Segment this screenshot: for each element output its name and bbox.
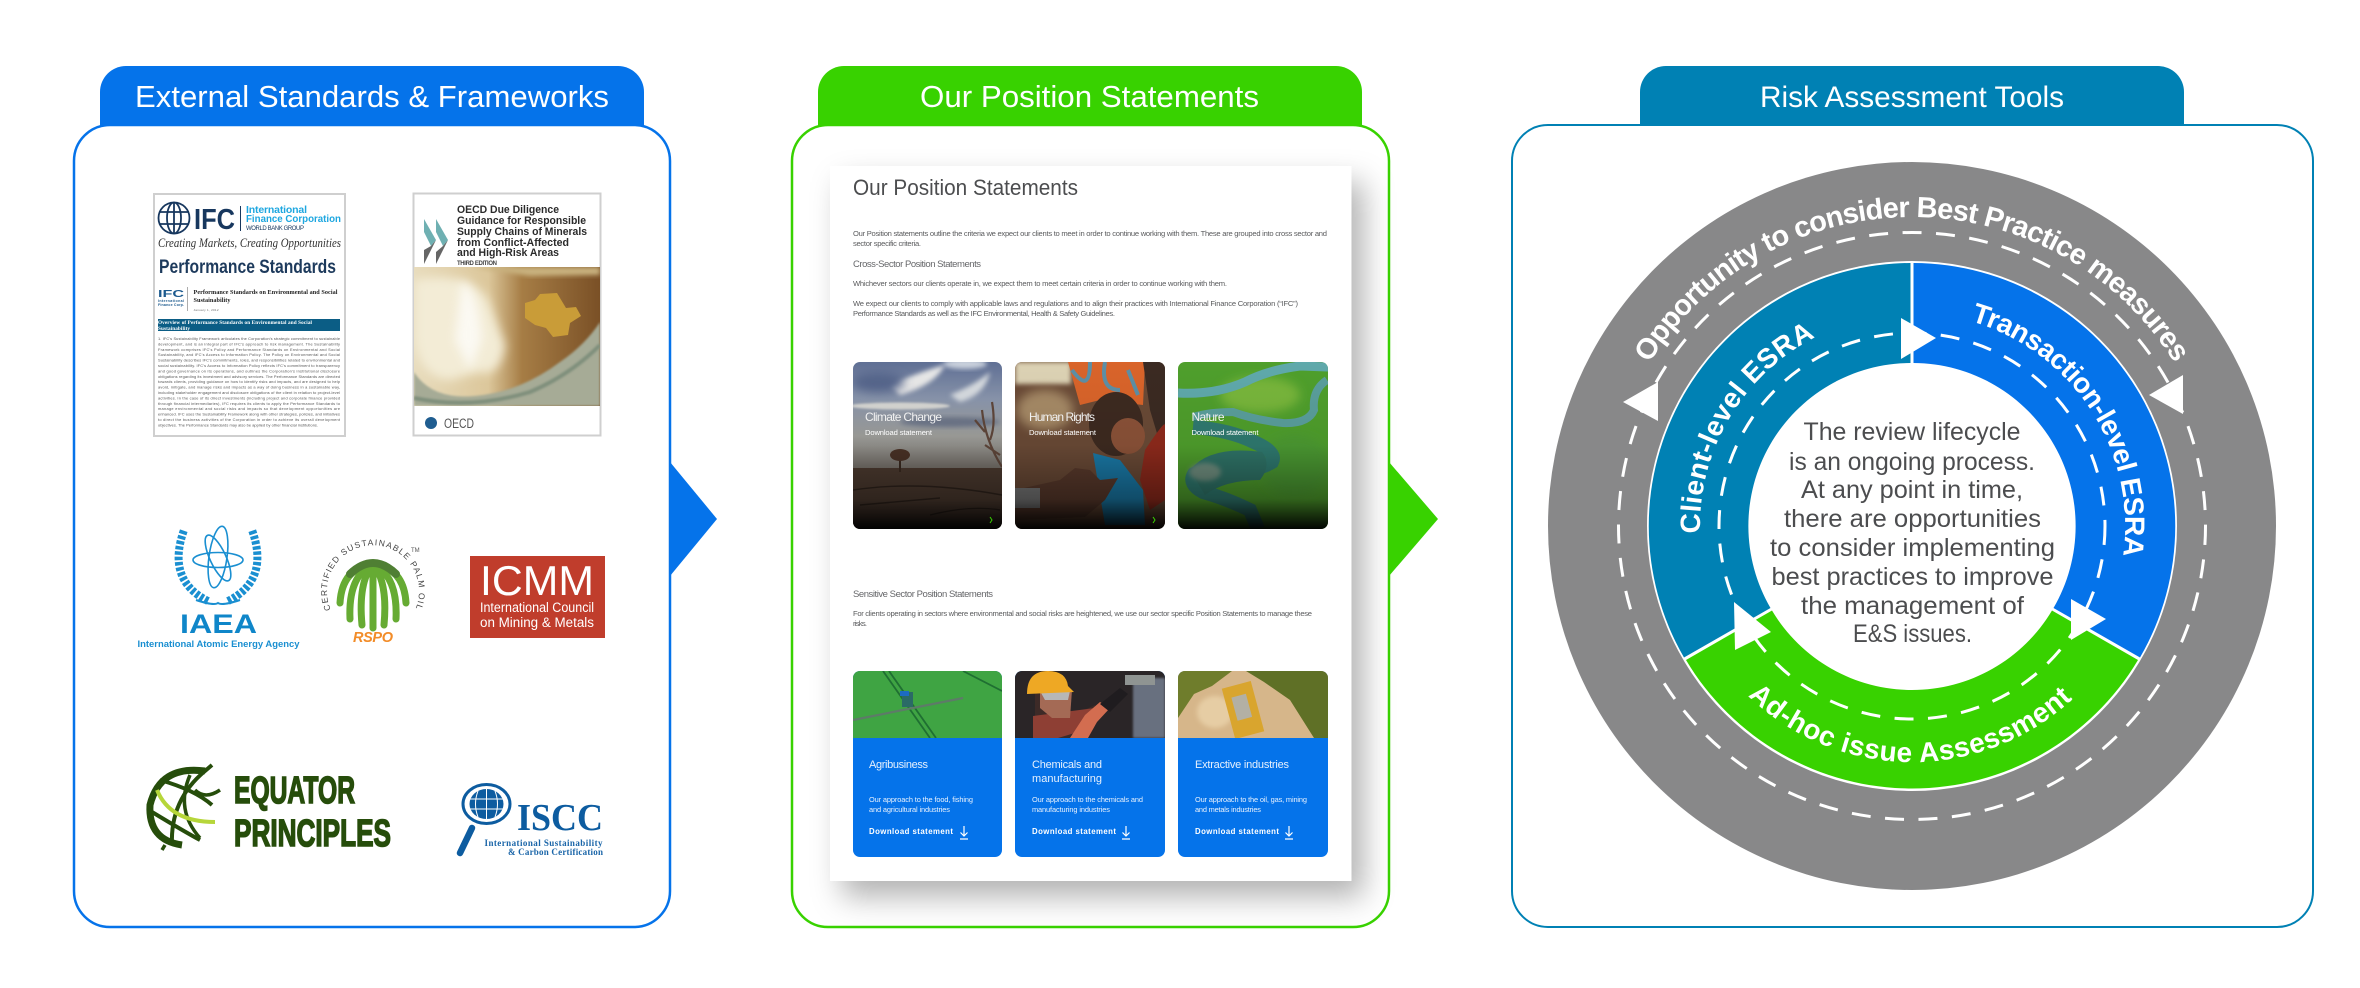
heading tab: Risk Assessment Tools: Risk Assessment Tools: [1760, 81, 2064, 114]
document: IFC Performance Standards: Performance Standards: [159, 257, 336, 278]
card: Chemicals and manufacturing: Chemicals and: [1032, 759, 1102, 771]
document: IFC Performance Standards: Creating Markets, Creating Opportunities: [158, 235, 341, 250]
section heading: sensitive sector: For clients operating in sectors where environmental and social risks are heightened, we use our sector specific Position Statements to manage these: [853, 609, 1312, 618]
label: transaction-level ESRA: Transaction-level ESRA: [1976, 302, 2144, 556]
card: Human Rights: Human Rights: [1029, 410, 1095, 424]
document: IFC Performance Standards: WORLD BANK GROUP: [246, 226, 304, 232]
icon: download: [1285, 826, 1293, 839]
panel outline: risk tools: [1512, 125, 2313, 927]
label: ad-hoc issue assessment: Ad-hoc issue Assessment: [1748, 686, 2072, 762]
text block: IFC overview body: 1. IFC's Sustainability Framework articulates the Corporation's strategic commitment to sustainable: [158, 336, 340, 341]
card: Extractive industries: Our approach to the oil, gas, mining: [1195, 795, 1307, 804]
icon: gold puzzle piece: [525, 293, 581, 337]
card: Extractive industries: Extractive industries: [1195, 759, 1290, 771]
card: Agribusiness: Our approach to the food, fishing: [869, 795, 973, 804]
card: Extractive industries: Download statement: [1195, 827, 1279, 836]
arrow: standards to position statements: [670, 462, 717, 576]
document: IFC Performance Standards: Finance Corporation: [246, 213, 341, 225]
adult hand: [1026, 468, 1118, 506]
text block: lifecycle description: is an ongoing process.: [1789, 448, 2035, 476]
card: Chemicals and manufacturing: manufacturing industries: [1032, 805, 1110, 814]
card: Chemicals and manufacturing: [1015, 671, 1165, 857]
text block: IFC overview body: and good governance on its operations, and outlines the Corporation's institutional disclosure: [158, 368, 340, 373]
card: Climate Change: [850, 359, 1002, 529]
text block: IFC overview body: to direct the business activities of the Corporation in order to achieve its overall development: [158, 417, 341, 422]
document: OECD Due Diligence Guidance: Supply Chains of Minerals: [457, 226, 587, 238]
text block: introduction: Whichever sectors our clients operate in, we expect them to meet certain criteria in order to continue working with them.: [853, 279, 1227, 288]
text block: lifecycle description: The review lifecycle: [1804, 418, 2020, 446]
card: Human Rights: [1015, 362, 1165, 529]
text block: lifecycle description: there are opportunities: [1784, 505, 2041, 533]
segment: transaction-level ESRA: [1914, 263, 2175, 658]
logo: ISCC: ISCC: [517, 797, 603, 839]
text block: introduction: Our Position statements outline the criteria we expect our clients to meet in order to continue working with them. These are grouped into cross sector and: [853, 229, 1327, 238]
section heading: sensitive sector: Sensitive Sector Position Statements: [853, 589, 993, 600]
segment: ad-hoc issue assessment: [1686, 610, 2138, 788]
icon: OECD logo: [425, 416, 474, 431]
heading tab: Risk Assessment Tools: [1640, 66, 2184, 126]
logo: IAEA: [138, 525, 300, 650]
card: Extractive industries: [1178, 671, 1328, 857]
heading tab: Our Position Statements: Our Position Statements: [920, 79, 1259, 114]
heading tab: External Standards & Frameworks: External Standards & Frameworks: [135, 79, 609, 114]
text block: IFC overview body: social sustainability. IFC's Access to Information Policy reflects IFC's commitment to transparency: [158, 363, 340, 368]
icon: equator globe: [150, 765, 220, 850]
logo: ICMM: International Council: [480, 600, 594, 615]
image: OECD cover photo with puzzle piece: [414, 267, 600, 406]
logo: ICMM: on Mining & Metals: [480, 615, 594, 630]
card: Climate Change: Climate Change: [865, 410, 942, 424]
section heading: sensitive sector: [853, 589, 1312, 628]
icon: IAEA laurel and atom: [179, 525, 257, 604]
card: Chemicals and manufacturing: Our approach to the chemicals and: [1032, 795, 1143, 804]
document: IFC Performance Standards: [154, 194, 345, 436]
document: IFC Performance Standards: IFC: [158, 289, 184, 300]
segment: client-level ESRA: [1649, 263, 1910, 658]
text block: IFC overview body: activities. In the case of its direct investments (including project and corporate finance provided: [158, 395, 340, 400]
document: IFC Performance Standards: IFC: [194, 204, 235, 236]
logo: Equator Principles: PRINCIPLES: [234, 813, 391, 855]
page title: Our Position Statements: [853, 175, 1078, 200]
document: IFC Performance Standards: International: [158, 299, 184, 303]
icon: download: [960, 826, 968, 839]
document: IFC Performance Standards: Performance Standards on Environmental and Social: [194, 289, 338, 296]
card: Climate Change: Download statement: [865, 428, 933, 437]
ring: outer best practice ring: [1548, 162, 2276, 890]
panel outline: position statements: [792, 125, 1389, 927]
logo: RSPO: CERTIFIED SUSTAINABLE PALM OIL: [321, 540, 425, 610]
text block: IFC overview body: avoid, mitigate, and manage risks and impacts as a way of doing business in a sustainable way,: [158, 385, 340, 390]
logo: ISCC: International Sustainability: [484, 838, 603, 848]
text block: introduction: Cross-Sector Position Statements: [853, 259, 981, 270]
icon: OECD chevrons: [424, 219, 448, 264]
text block: IFC overview body: obligations regarding its investment and advisory services. The Performance Standards are directed: [158, 374, 340, 379]
text block: IFC overview body: Framework comprises IFC's Policy and Performance Standards on Environmental and Social: [158, 347, 340, 352]
document: OECD Due Diligence Guidance: [414, 194, 600, 436]
panel: external standards and frameworks: [72, 66, 672, 928]
logo: Equator Principles: [150, 765, 391, 855]
document: IFC Performance Standards: Sustainability: [158, 326, 190, 332]
card: Chemicals and manufacturing: Download statement: [1032, 827, 1116, 836]
arrow heads: [1623, 318, 2183, 650]
text block: lifecycle description: to consider implementing: [1770, 534, 2055, 562]
document: IFC Performance Standards: International: [246, 204, 307, 216]
card: Human Rights: Download statement: [1029, 428, 1097, 437]
text block: lifecycle description: E&S issues.: [1853, 620, 1972, 648]
logo: RSPO: RSPO: [353, 630, 394, 646]
logo: RSPO: TM: [411, 548, 420, 554]
icon: download: [1122, 826, 1130, 839]
document: IFC Performance Standards: January 1, 2012: [194, 308, 219, 312]
panel: our position statements: [792, 66, 1389, 927]
heading tab: Our Position Statements: [818, 66, 1362, 126]
text block: lifecycle description: best practices to improve: [1772, 563, 2054, 591]
text block: IFC overview body: Sustainability, and IFC's Access to Information Policy. The Policy on Environmental and Social: [158, 352, 340, 357]
text block: lifecycle description: the management of: [1801, 592, 2024, 620]
logo: IAEA: IAEA: [180, 609, 257, 639]
card: Nature: [1178, 362, 1331, 529]
arrow: position statements to risk tools: [1389, 462, 1438, 576]
label: opportunity to consider best practice: Opportunity to consider Best Practice measures: [1636, 197, 2185, 360]
text block: introduction: We expect our clients to comply with applicable laws and regulations and to align their practices with International Finance Corporation (“IFC”): [853, 299, 1298, 308]
mining truck: [1222, 681, 1264, 739]
logo: IAEA: International Atomic Energy Agency: [138, 639, 300, 650]
dashed lifecycle paths: [1618, 232, 2206, 820]
document: OECD Due Diligence Guidance: Guidance for Responsible: [457, 215, 586, 227]
text block: IFC overview body: manage environmental and social risks and impacts so that development opportunities are: [158, 406, 340, 411]
document: IFC Performance Standards: Sustainability: [194, 297, 231, 304]
card: Extractive industries: and metals industries: [1195, 805, 1261, 814]
card: Agribusiness: [853, 671, 1002, 857]
panel outline: external standards: [74, 125, 670, 927]
icon: OECD logo: OECD: [444, 416, 474, 431]
icon: lone tree: [899, 461, 901, 472]
text block: IFC overview body: development, and is an integral part of IFC's approach to risk management. The Sustainability: [158, 341, 340, 346]
text block: IFC overview body: enhanced. IFC uses the Sustainability Framework along with other strategies, policies, and initiatives: [158, 412, 340, 417]
icon: magnifying glass globe: [460, 784, 510, 853]
card: Agribusiness: Download statement: [869, 827, 953, 836]
logo: ISCC: [460, 784, 603, 857]
card: Nature: Download statement: [1192, 428, 1259, 437]
text block: introduction: sector specific criteria.: [853, 239, 921, 248]
text block: IFC overview body: objectives. The Performance Standards may also be applied by other financial institutions.: [158, 422, 318, 427]
text block: IFC overview body: including stakeholder engagement and disclosure obligations of the client in relation to project-level: [158, 390, 340, 395]
document: IFC Performance Standards: Overview of Performance Standards on Environmental and Social: [158, 320, 313, 326]
logo: ICMM: ICMM: [480, 557, 594, 604]
document: OECD Due Diligence Guidance: THIRD EDITION: [457, 261, 497, 267]
text block: IFC overview body: through financial intermediaries), IFC requires its clients to apply the Performance Standards to: [158, 401, 340, 406]
document: OECD Due Diligence Guidance: and High-Risk Areas: [457, 247, 559, 259]
text block: IFC overview body: Sustainability describes IFC's commitments, roles, and responsibilities related to environmental and: [158, 358, 340, 363]
card: Agribusiness: and agricultural industries: [869, 805, 950, 814]
heading tab: External Standards & Frameworks: [100, 66, 644, 126]
document: IFC Performance Standards: Finance Corp.: [158, 303, 184, 307]
text block: IFC overview body: [158, 336, 341, 427]
logo: RSPO: [321, 540, 425, 646]
text block: IFC overview body: towards clients, providing guidance on how to identify risks and impacts, and are designed to help: [158, 379, 340, 384]
card: Nature: Nature: [1192, 410, 1225, 424]
panel: risk assessment tools: [1511, 66, 2314, 928]
icon: IFC globe: [158, 202, 190, 234]
child head: [1089, 392, 1143, 456]
logo: Equator Principles: EQUATOR: [234, 770, 355, 812]
text block: introduction: Performance Standards as well as the IFC Environmental, Health & Safety Guidelines.: [853, 309, 1115, 318]
section heading: sensitive sector: risks.: [853, 619, 867, 628]
card: Agribusiness: Agribusiness: [869, 759, 928, 771]
web page screenshot: [830, 166, 1352, 881]
text block: lifecycle description: At any point in time,: [1801, 476, 2023, 504]
text block: lifecycle description: [1770, 418, 2055, 648]
text block: introduction: [853, 229, 1327, 318]
logo: ISCC: & Carbon Certification: [508, 847, 603, 857]
document: OECD Due Diligence Guidance: OECD Due Diligence: [457, 204, 559, 216]
label: client-level ESRA: Client-level ESRA: [1680, 324, 1815, 532]
card: Chemicals and manufacturing: manufacturing: [1032, 773, 1102, 785]
document: OECD Due Diligence Guidance: from Conflict-Affected: [457, 237, 569, 249]
logo: ICMM: [470, 556, 605, 638]
diagram: review lifecycle rings: [1548, 162, 2276, 890]
icon: palm fronds: [340, 563, 406, 628]
